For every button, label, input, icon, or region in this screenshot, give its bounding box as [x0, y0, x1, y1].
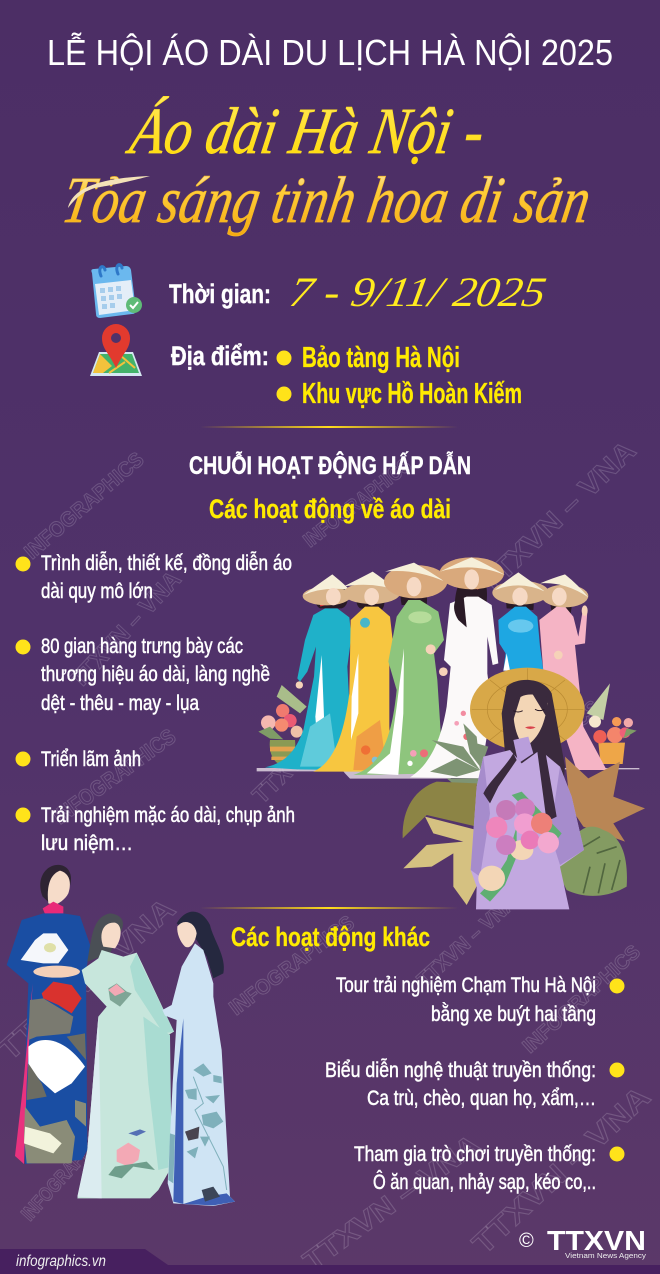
- location list: Khu vực Hồ Hoàn Kiếm: [302, 378, 522, 410]
- right flower pot: [587, 683, 637, 764]
- date: 7 - 9/11/ 2025: [286, 269, 549, 316]
- header title: LỄ HỘI ÁO DÀI DU LỊCH HÀ NỘI 2025: [47, 31, 613, 73]
- woman with conical hat and bouquet: [470, 668, 585, 909]
- watermarks: TTXVN – VNA: [247, 686, 374, 809]
- illustration: three women in painted ao dai: [7, 865, 235, 1206]
- list: other activities: [325, 974, 624, 1194]
- list: other activities: Tham gia trò chơi truyền thống:: [354, 1143, 596, 1166]
- location list: Bảo tàng Hà Nội: [302, 342, 460, 374]
- list: other activities: Ô ăn quan, nhảy sạp, kéo co,..: [373, 1171, 596, 1194]
- watermarks: INFOGRAPHICS: [17, 1121, 114, 1225]
- list: ao dai activities: dài quy mô lớn: [41, 580, 153, 603]
- watermarks: TTXVN – VNA: [413, 891, 521, 992]
- icon: calendar: [91, 265, 142, 318]
- watermarks: TTXVN – VNA: [473, 435, 642, 599]
- list: ao dai activities: [16, 552, 295, 855]
- woman: pink: [539, 584, 607, 770]
- woman: mint dress: [77, 913, 174, 1198]
- woman: light blue dress: [162, 912, 235, 1206]
- script title: Áo dài Hà Nội -: [122, 95, 490, 168]
- script title: [57, 95, 596, 248]
- floor: [257, 768, 639, 779]
- subheading: other activities: Các hoạt động khác: [231, 922, 430, 952]
- subheading: ao dai activities: Các hoạt động về áo dài: [209, 494, 451, 524]
- icon: map pin: [90, 324, 142, 376]
- watermarks: INFOGRAPHICS: [478, 696, 605, 814]
- list: ao dai activities: lưu niệm…: [41, 832, 133, 855]
- woman: yellow: [313, 585, 393, 772]
- list: ao dai activities: 80 gian hàng trưng bày các: [41, 635, 243, 658]
- list: ao dai activities: Trình diễn, thiết kế, đồng diễn áo: [41, 552, 292, 575]
- watermarks: INFOGRAPHICS: [300, 455, 416, 552]
- illustration: six women and woman with hat: [257, 557, 645, 909]
- woman: teal: [265, 587, 351, 770]
- list: ao dai activities: Triển lãm ảnh: [41, 748, 141, 771]
- list: ao dai activities: Trải nghiệm mặc áo dài, chụp ảnh: [41, 804, 295, 827]
- watermarks: TTXVN – VNA: [466, 1080, 657, 1261]
- source url: infographics.vn: [16, 1253, 106, 1270]
- footer band: [0, 1249, 660, 1274]
- list: other activities: Tour trải nghiệm Chạm Thu Hà Nội: [336, 974, 596, 997]
- decorative leaves: [403, 723, 645, 905]
- copyright logo: Vietnam News Agency: [565, 1253, 647, 1260]
- watermarks: INFOGRAPHICS: [225, 911, 359, 1020]
- watermarks: TTXVN – VNA: [297, 1128, 485, 1274]
- copyright logo: [519, 1225, 647, 1260]
- watermarks: [0, 435, 657, 1274]
- list: other activities: Ca trù, chèo, quan họ, xẩm,…: [367, 1087, 596, 1110]
- watermarks: INFOGRAPHICS: [48, 724, 180, 829]
- woman: white: [410, 568, 498, 778]
- list: ao dai activities: dệt - thêu - may - lụa: [41, 692, 199, 715]
- list: other activities: Biểu diễn nghệ thuật truyền thống:: [325, 1059, 596, 1082]
- woman: green: [353, 572, 444, 775]
- woman: navy dress: [7, 865, 91, 1164]
- woman: blue: [498, 585, 543, 671]
- watermarks: INFOGRAPHICS: [519, 941, 645, 1058]
- list: other activities: bằng xe buýt hai tầng: [431, 1003, 596, 1026]
- location label: Địa điểm:: [171, 341, 269, 371]
- watermarks: TTXVN – VNA: [65, 566, 187, 694]
- watermarks: INFOGRAPHICS: [20, 448, 148, 564]
- location list: [276, 342, 522, 410]
- copyright logo: TTXVN: [547, 1225, 646, 1256]
- copyright logo: ©: [519, 1230, 534, 1252]
- left flower pot: [258, 685, 307, 765]
- time label: Thời gian:: [169, 279, 271, 309]
- section heading: CHUỖI HOẠT ĐỘNG HẤP DẪN: [189, 450, 471, 480]
- faces and hats: [303, 557, 588, 607]
- list: ao dai activities: thương hiệu áo dài, làng nghề: [41, 663, 270, 686]
